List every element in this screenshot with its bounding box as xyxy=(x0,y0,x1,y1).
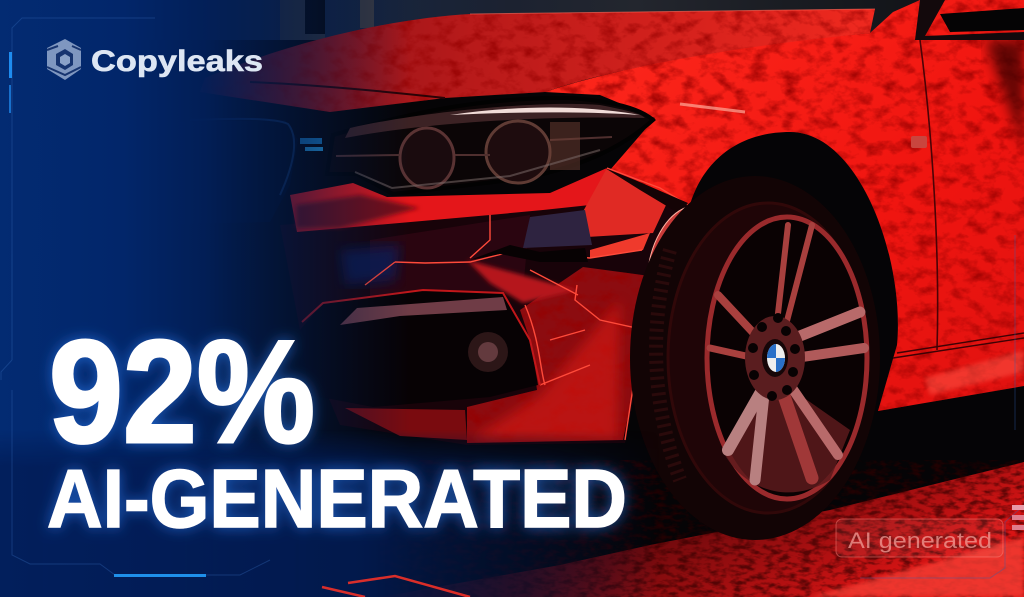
bottom edge glow xyxy=(345,408,467,440)
road surface xyxy=(380,460,1024,597)
car: front wheel xyxy=(630,176,880,540)
car: fender, door and sill xyxy=(540,0,1024,420)
headline: 92%: 92% xyxy=(49,310,315,473)
lower right panel xyxy=(467,267,657,443)
logo icon xyxy=(47,39,81,80)
logo wordmark: Copyleaks xyxy=(91,45,263,78)
road markings xyxy=(322,576,470,597)
lens right xyxy=(486,121,550,183)
car: red bumper band xyxy=(290,168,640,232)
rim xyxy=(707,217,867,499)
car: grille xyxy=(180,119,323,224)
lens left xyxy=(400,128,454,188)
dark metallic patch xyxy=(523,210,592,248)
car: hood xyxy=(212,8,875,112)
logo: Copyleaks xyxy=(47,39,263,80)
tyre xyxy=(630,176,880,540)
car: cracked damaged bumper xyxy=(345,168,688,450)
cracks xyxy=(365,168,688,440)
spokes xyxy=(710,225,864,480)
car: headlight xyxy=(327,98,653,194)
watermark: AI generated xyxy=(836,519,1003,557)
rim lower highlight xyxy=(725,395,850,492)
car: fog light intake xyxy=(300,290,540,407)
centre lit patch xyxy=(467,260,577,303)
car: lower bumper dark base xyxy=(280,205,690,445)
second lit panel xyxy=(590,233,650,258)
fog lamp xyxy=(468,332,508,372)
veil behind headline xyxy=(0,430,660,597)
upper lit panel xyxy=(580,168,667,237)
watermark: AI generated: AI generated xyxy=(848,528,992,553)
headline: AI-GENERATED: AI-GENERATED xyxy=(47,452,627,545)
BMW hub badge xyxy=(762,339,788,377)
